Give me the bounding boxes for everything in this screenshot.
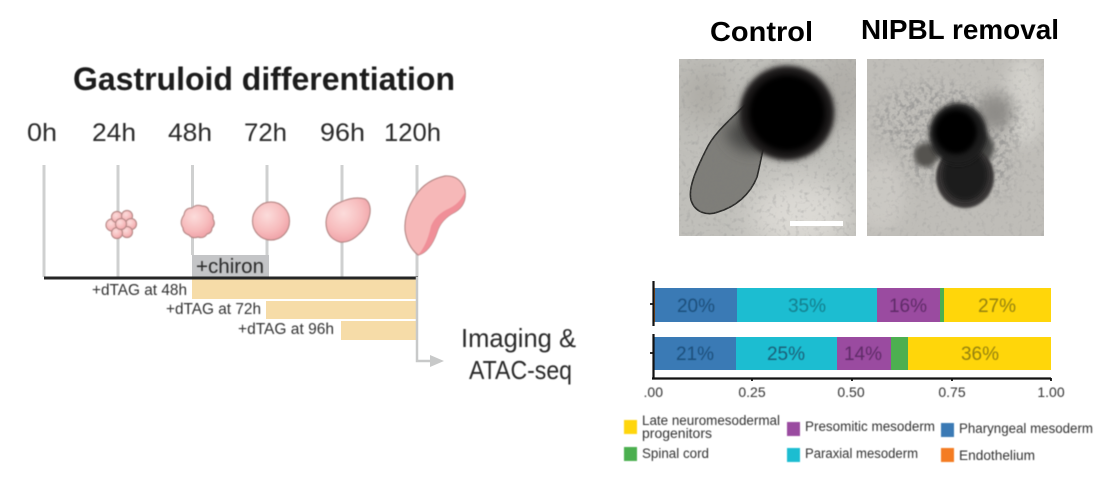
micrograph: NIPBL removal (855, 55, 1045, 236)
time gridlines (44, 165, 417, 277)
dTAG treatment bars: +dTAG at 96h (238, 321, 334, 338)
dense head (740, 66, 834, 160)
axis tick labels: 0.75 (938, 384, 966, 400)
time labels: 48h (168, 119, 212, 147)
bar: top sample: 27% (978, 296, 1016, 317)
stacked bar chart (644, 281, 1065, 400)
bar: top sample: 16% (889, 296, 927, 317)
axis tick labels (644, 384, 1065, 400)
legend item: spinal cord: Spinal cord (642, 446, 709, 461)
readout label: Imaging & (461, 323, 576, 353)
stage: 120h gastruloid (405, 176, 465, 255)
legend item: late neuromesodermal progenitors (624, 413, 780, 441)
bar: top sample: 20% (677, 296, 715, 317)
axis tick labels: .00 (644, 384, 663, 400)
arrow to readout (417, 277, 444, 367)
heading: control: Control (710, 16, 813, 47)
timeline axis (44, 276, 418, 280)
legend item: late neuromesodermal progenitors: progenitors (642, 426, 712, 441)
gastruloid stages (106, 176, 465, 255)
time labels: 120h (384, 119, 441, 147)
bar: top sample (653, 288, 1051, 322)
axis tick labels: 0.50 (837, 384, 865, 400)
time labels (27, 119, 441, 147)
dTAG treatment bars (92, 279, 416, 340)
bar: bottom sample: 36% (961, 344, 999, 365)
chiron bar: +chiron (196, 256, 264, 278)
legend item: presomitic mesoderm: Presomitic mesoderm (805, 419, 935, 434)
bar: top sample: 35% (788, 296, 826, 317)
stage: 48h (181, 205, 214, 238)
time labels: 24h (92, 119, 136, 147)
legend (624, 413, 1093, 463)
time labels: 0h (27, 119, 57, 147)
time labels: 96h (320, 119, 365, 147)
stage: 72h (252, 202, 290, 240)
readout label (461, 323, 576, 385)
stage: 24h cell cluster (106, 210, 136, 238)
title: Gastruloid differentiation (73, 61, 455, 97)
dTAG treatment bars: +dTAG at 72h (166, 301, 261, 318)
bar: bottom sample: 14% (844, 344, 882, 365)
bar: bottom sample (653, 337, 1051, 370)
chart axes (650, 281, 1051, 381)
legend item: late neuromesodermal progenitors: Late neuromesodermal (642, 413, 780, 428)
stage: 96h (326, 198, 370, 242)
time labels: 72h (244, 119, 287, 147)
legend item: paraxial mesoderm: Paraxial mesoderm (805, 446, 918, 461)
bar: bottom sample: 25% (767, 344, 805, 365)
micrograph: control (679, 59, 856, 236)
elongated tail (690, 106, 766, 214)
legend item: endothelium: Endothelium (959, 448, 1035, 463)
cell debris halo (875, 82, 1022, 198)
axis tick labels: 0.25 (738, 384, 766, 400)
heading: NIPBL removal: NIPBL removal (861, 14, 1059, 45)
axis tick labels: 1.00 (1037, 384, 1065, 400)
timeline schematic (27, 119, 576, 385)
scale bar (790, 221, 843, 226)
readout label: ATAC-seq (469, 355, 572, 385)
legend item: pharyngeal mesoderm: Pharyngeal mesoderm (959, 421, 1093, 436)
dTAG treatment bars: +dTAG at 48h (92, 282, 187, 299)
bar: bottom sample: 21% (676, 344, 714, 365)
